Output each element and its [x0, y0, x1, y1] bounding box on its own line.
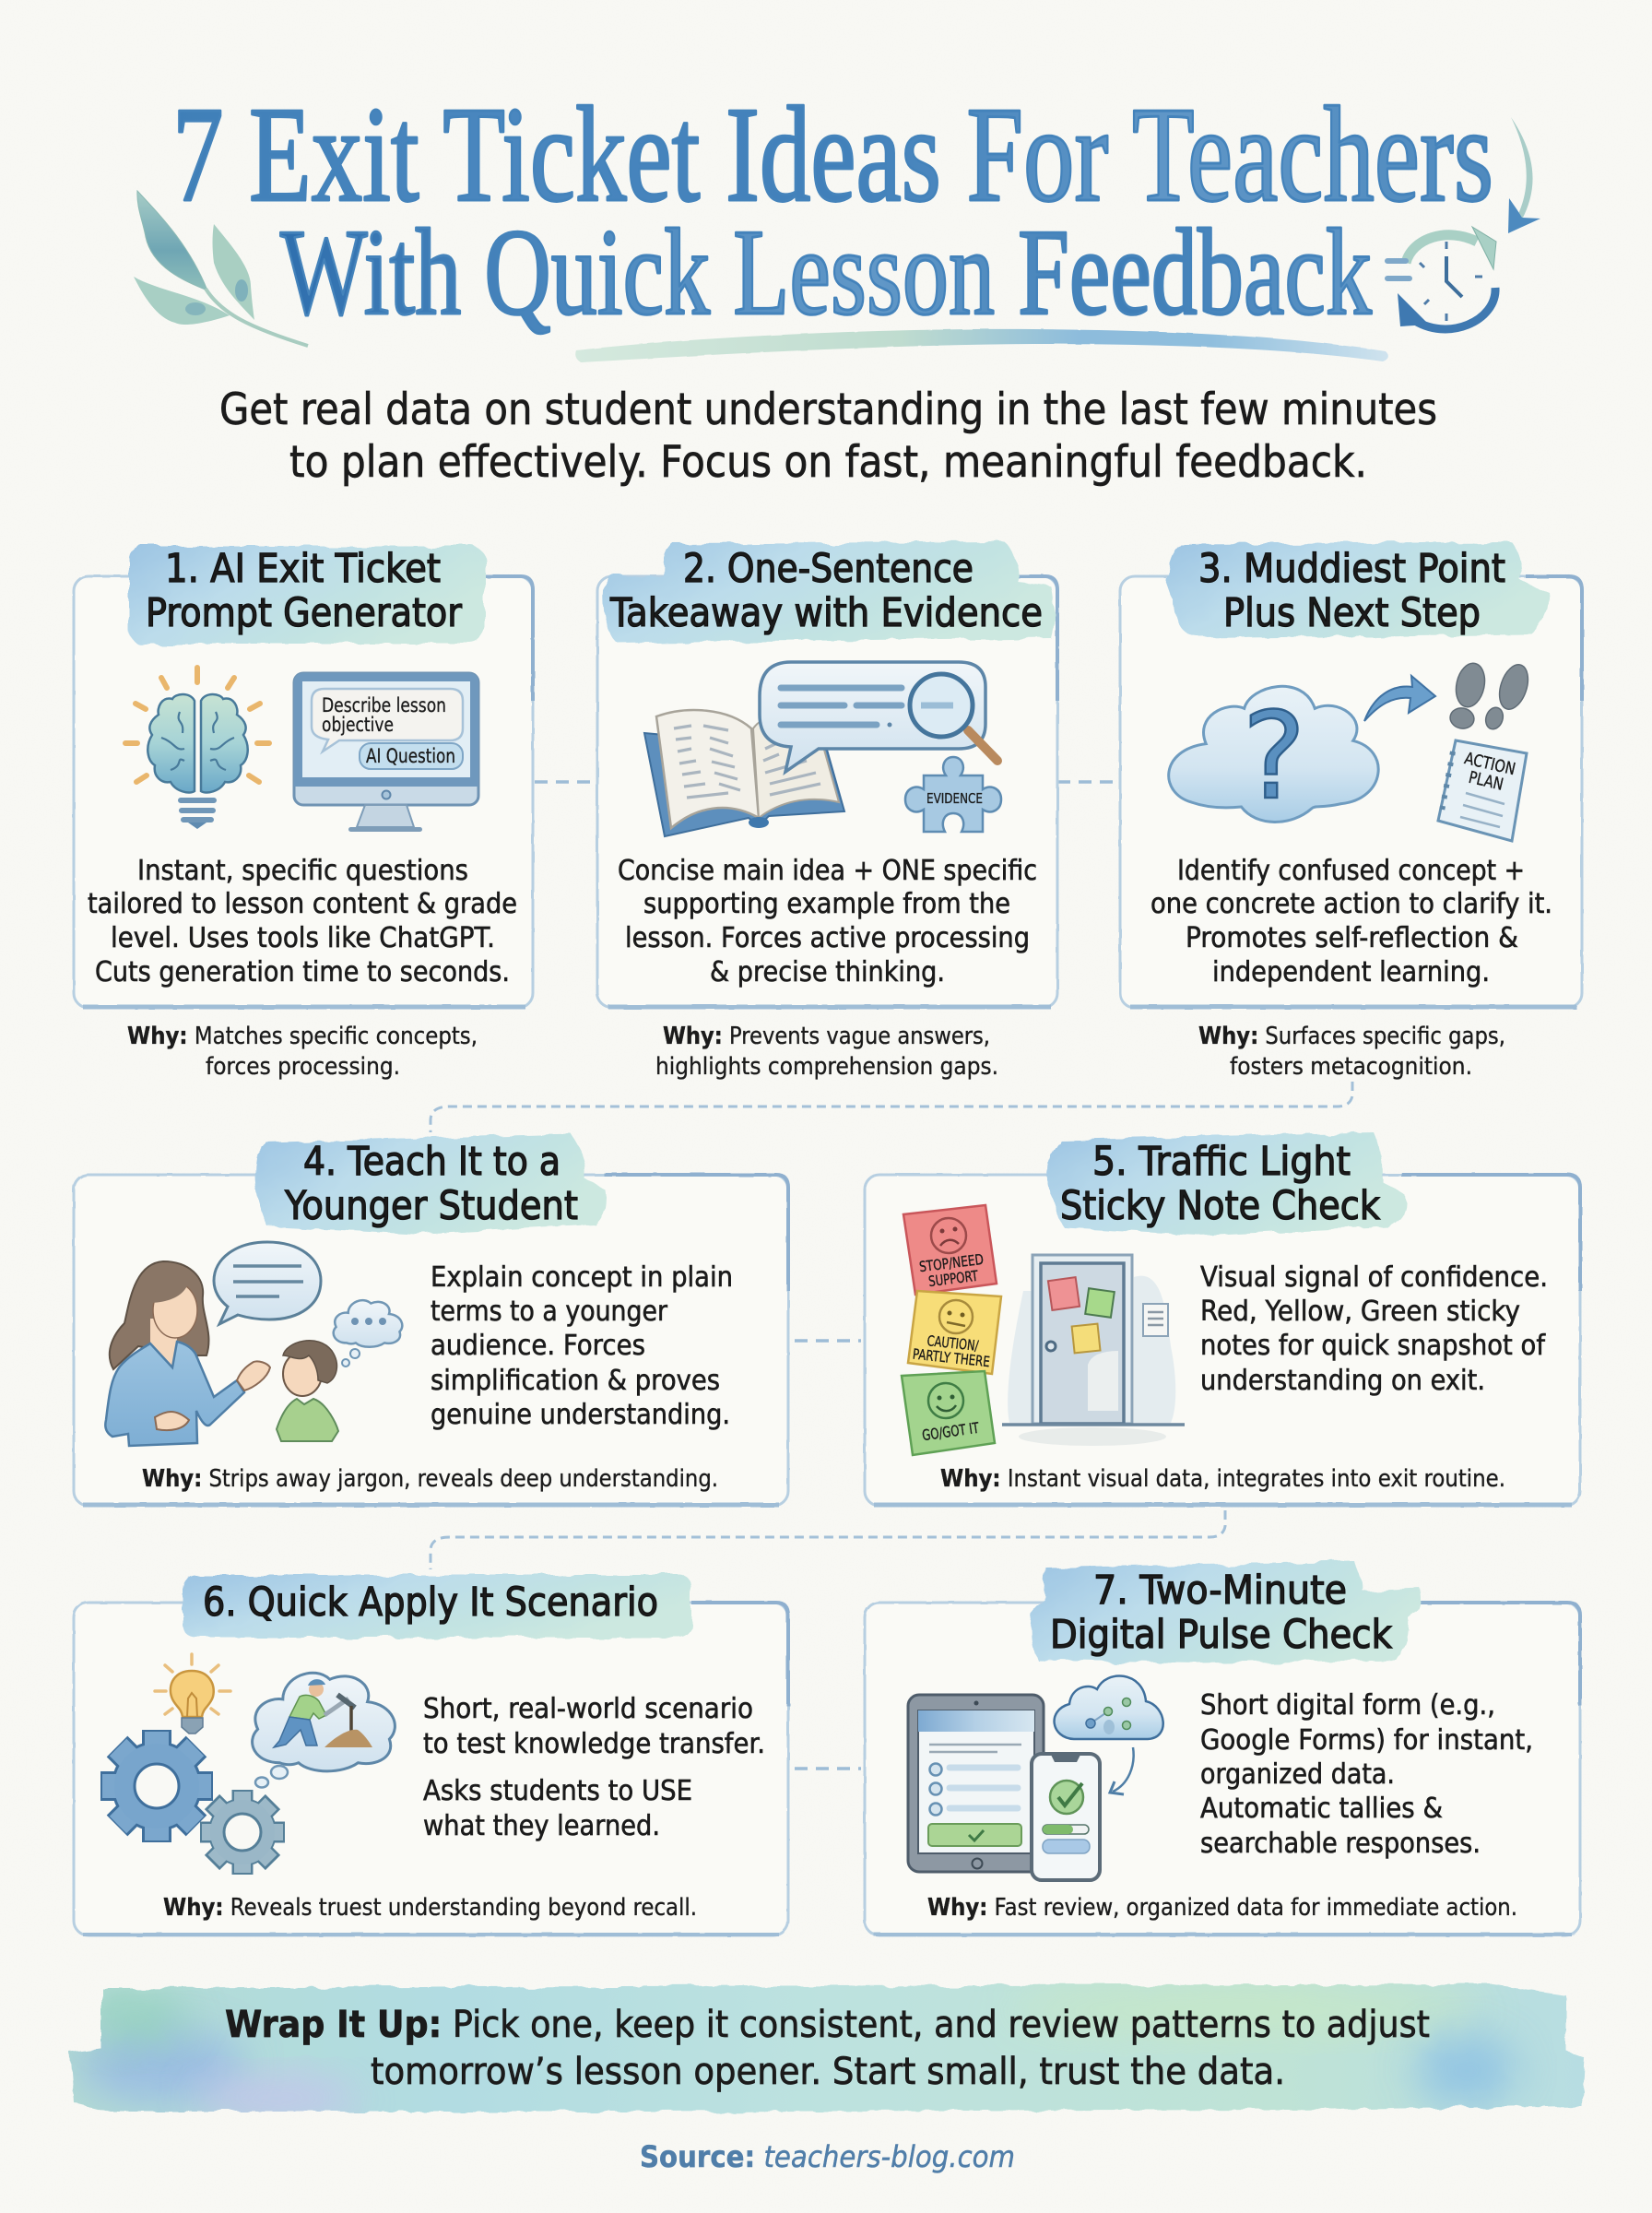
icon: sticky notes	[902, 1205, 1001, 1455]
body text: terms to a younger	[431, 1296, 668, 1328]
body text: notes for quick snapshot of	[1200, 1330, 1546, 1362]
green sticky	[902, 1371, 995, 1455]
body text: searchable responses.	[1200, 1828, 1481, 1860]
red sticky: STOP/NEED	[918, 1251, 985, 1275]
icon: thought cloud worker	[253, 1673, 395, 1787]
bubble text	[312, 689, 463, 769]
bubble text: AI Question	[366, 745, 455, 767]
icon: footprints	[1448, 660, 1533, 731]
heading	[254, 1134, 606, 1234]
subtitle: to plan effectively. Focus on fast, meaningful feedback.	[289, 437, 1367, 488]
body text: Promotes self-reflection &	[1186, 922, 1518, 954]
why text	[655, 1023, 998, 1081]
icon: teacher and student	[105, 1261, 338, 1446]
large gear	[100, 1730, 213, 1842]
body text	[1200, 1689, 1533, 1860]
why text: Why: Surfaces specific gaps,	[1198, 1023, 1505, 1050]
icon: watercolor leaves	[134, 191, 308, 346]
icon: evidence puzzle: EVIDENCE	[926, 790, 983, 807]
student	[277, 1341, 338, 1441]
small gear	[200, 1790, 285, 1875]
connector: 2 to 3	[1057, 780, 1120, 784]
why text: Why: Prevents vague answers,	[663, 1023, 990, 1050]
why text: Why: Strips away jargon, reveals deep understanding.	[142, 1465, 718, 1493]
why text: forces processing.	[206, 1053, 400, 1081]
body text: simplification & proves	[431, 1365, 720, 1397]
panel: 1 AI exit ticket	[74, 546, 533, 1081]
why text: Why: Matches specific concepts,	[127, 1023, 478, 1050]
subtitle	[219, 385, 1437, 488]
body text: tailored to lesson content & grade	[88, 888, 517, 920]
body text: genuine understanding.	[431, 1399, 730, 1431]
icon: phone	[1032, 1754, 1100, 1880]
icon: lightbulb	[155, 1654, 230, 1734]
body text: lesson. Forces active processing	[625, 922, 1030, 954]
panel: 2 one-sentence takeaway	[597, 542, 1057, 1081]
heading: Sticky Note Check	[1060, 1183, 1380, 1229]
brush underline	[575, 329, 1388, 362]
icon: clock with circular arrows	[1387, 227, 1496, 329]
icon: speech bubble	[214, 1242, 321, 1324]
heading: 4. Teach It to a	[303, 1139, 560, 1185]
yellow sticky: CAUTION/	[926, 1332, 980, 1355]
body text: audience. Forces	[431, 1330, 645, 1362]
wrap it up banner: Wrap It Up: Pick one, keep it consistent, and review patterns to adjust	[225, 2004, 1430, 2046]
body text: Instant, specific questions	[137, 855, 468, 887]
body text: Identify confused concept +	[1177, 855, 1525, 887]
panel: 5 traffic light	[865, 1132, 1580, 1506]
heading: Prompt Generator	[146, 590, 462, 636]
heading: 5. Traffic Light	[1092, 1139, 1351, 1185]
body text: Asks students to USE	[423, 1775, 692, 1807]
body text	[618, 855, 1037, 988]
panel: 7 digital pulse	[865, 1562, 1580, 1935]
yellow sticky	[908, 1291, 1001, 1374]
body text: Explain concept in plain	[431, 1261, 733, 1294]
heading	[183, 1575, 692, 1638]
icon: open book	[644, 710, 844, 836]
icon: gears	[100, 1730, 285, 1875]
connector: 4 to 5	[795, 1339, 861, 1343]
body text: Google Forms) for instant,	[1200, 1724, 1533, 1757]
teacher	[105, 1261, 270, 1446]
source: Source: teachers-blog.com	[640, 2139, 1015, 2174]
icon: question cloud	[1169, 686, 1378, 826]
red sticky	[903, 1205, 997, 1295]
icon: data cloud	[1055, 1675, 1163, 1794]
body text: what they learned.	[423, 1810, 660, 1842]
heading	[129, 546, 484, 644]
connector: 1 to 2	[535, 780, 597, 784]
body text: independent learning.	[1212, 956, 1490, 988]
bubble text: objective	[322, 714, 394, 736]
panel: 4 teach it	[74, 1134, 788, 1506]
body text: Concise main idea + ONE specific	[618, 855, 1037, 887]
red sticky: SUPPORT	[927, 1268, 979, 1290]
body text: Cuts generation time to seconds.	[95, 956, 510, 988]
icon: speech bubble	[760, 662, 985, 772]
subtitle: Get real data on student understanding in the last few minutes	[219, 385, 1437, 435]
yellow sticky: PARTLY THERE	[912, 1346, 991, 1370]
why text: highlights comprehension gaps.	[655, 1053, 998, 1081]
body text: Visual signal of confidence.	[1200, 1261, 1548, 1294]
body text	[88, 855, 517, 988]
why text: Why: Reveals truest understanding beyond recall.	[163, 1894, 697, 1922]
icon: action plan notepad: PLAN	[1467, 768, 1505, 795]
body text: Short digital form (e.g.,	[1200, 1689, 1495, 1722]
body text	[423, 1693, 765, 1842]
heading: 7. Two-Minute	[1093, 1568, 1347, 1614]
body text: understanding on exit.	[1200, 1365, 1485, 1397]
icon: evidence puzzle	[905, 757, 1001, 832]
heading: Digital Pulse Check	[1050, 1612, 1392, 1658]
connector: 6 to 7	[795, 1767, 861, 1770]
heading: Younger Student	[284, 1183, 578, 1229]
body text	[431, 1261, 733, 1431]
icon: monitor	[294, 673, 478, 832]
wrap it up banner: tomorrow’s lesson opener. Start small, trust the data.	[371, 2051, 1285, 2093]
heading: Plus Next Step	[1223, 590, 1481, 636]
green sticky: GO/GOT IT	[921, 1419, 980, 1444]
heading text: 6. Quick Apply It Scenario	[203, 1580, 658, 1626]
body text: level. Uses tools like ChatGPT.	[111, 922, 495, 954]
title	[172, 79, 1493, 340]
icon: classroom door	[1002, 1255, 1185, 1446]
heading	[1166, 542, 1550, 638]
body text: to test knowledge transfer.	[423, 1728, 765, 1760]
body text: Automatic tallies &	[1200, 1793, 1443, 1825]
why text	[127, 1023, 478, 1081]
wrap it up banner	[70, 1984, 1585, 2118]
icon: curved arrow	[1508, 117, 1540, 233]
heading	[603, 542, 1054, 644]
body text: & precise thinking.	[710, 956, 945, 988]
icon: brain bulb	[125, 668, 269, 829]
body text: one concrete action to clarify it.	[1150, 888, 1552, 920]
why text	[1198, 1023, 1505, 1081]
icon: magnifier	[910, 674, 997, 761]
heading	[1032, 1562, 1422, 1663]
body text: Red, Yellow, Green sticky	[1200, 1296, 1520, 1328]
bubble text: Describe lesson	[322, 694, 446, 716]
icon: action plan notepad: ACTION	[1462, 749, 1517, 779]
why text: Why: Fast review, organized data for immediate action.	[927, 1894, 1517, 1922]
panel: 3 muddiest point	[1120, 542, 1582, 1081]
heading	[1047, 1132, 1406, 1236]
why text: Why: Instant visual data, integrates into exit routine.	[940, 1465, 1505, 1493]
connector: 5 to 6	[431, 1510, 1225, 1569]
body text	[1200, 1261, 1548, 1397]
body text: supporting example from the	[643, 888, 1010, 920]
heading: 2. One-Sentence	[683, 546, 974, 592]
panel: 6 quick apply	[74, 1575, 788, 1935]
icon: arrow	[1364, 676, 1435, 721]
icon: action plan notepad	[1438, 740, 1527, 841]
body text: organized data.	[1200, 1758, 1395, 1791]
why text: fosters metacognition.	[1230, 1053, 1472, 1081]
heading: 1. AI Exit Ticket	[165, 546, 441, 592]
heading: Takeaway with Evidence	[609, 590, 1043, 636]
connector: 3 to 4	[431, 1082, 1352, 1132]
icon: tablet form	[908, 1695, 1044, 1872]
icon: thought cloud	[334, 1300, 402, 1367]
icon: question cloud: ?	[1243, 686, 1305, 826]
body text: Short, real-world scenario	[423, 1693, 753, 1725]
heading: 3. Muddiest Point	[1198, 546, 1505, 592]
body text	[1150, 855, 1552, 988]
